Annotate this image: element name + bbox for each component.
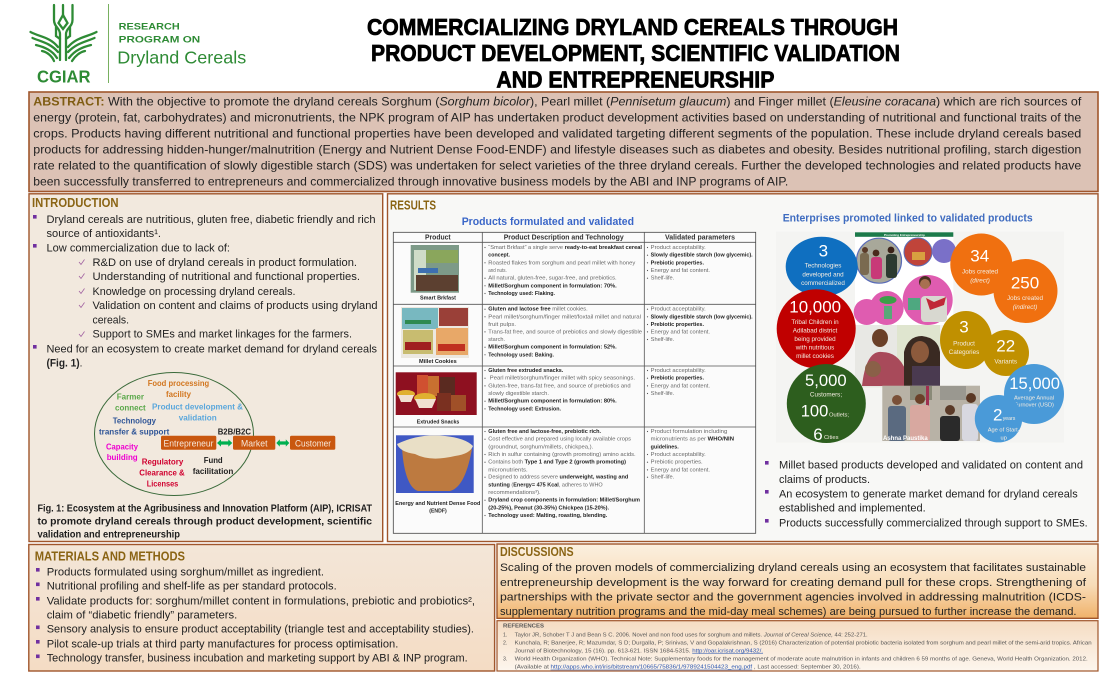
methods text: Sensory analysis to ensure product acceptability (triangle test and acceptability studies).	[47, 624, 474, 636]
reference list: Journal of Biotechnology, 15 (16). pp. 613-621. ISSN 1684-5315. http://oar.icrisat.org/9432/.	[515, 648, 763, 654]
discussions text: supplementary nutrition programs and the mid-day meal schemes) are being pursued to further increase the demand.	[500, 606, 1076, 618]
diagram: ecosystem ellipse: building	[107, 452, 138, 462]
methods text: claim of “diabetic friendly” parameters.	[47, 609, 237, 621]
intro text: Understanding of nutritional and functional properties.	[92, 271, 360, 283]
results summary bullets: claims of products.	[779, 474, 870, 486]
bubble: 34 direct jobs: (direct)	[970, 277, 990, 284]
bubble: 15,000 turnover: Average Annual	[1014, 395, 1054, 401]
logo: CGIAR Research Program on Dryland Cereals	[30, 4, 247, 87]
abstract text: rate related to the quantification of slowly digestible starch (SDS) was undertaken for select varieties of the three dryland cereals. Further the developed technologies and related products have	[33, 158, 1082, 172]
table description column	[484, 245, 643, 519]
reference list: 1.	[503, 633, 507, 639]
abstract text	[33, 94, 1082, 188]
bubble: 3 product categories: Categories	[949, 349, 979, 356]
intro text: cereals.	[92, 314, 129, 326]
intro text: Validation on content and claims of products using dryland	[92, 300, 378, 312]
table: products	[393, 232, 756, 533]
table description column: Contains both Type 1 and Type 2 (growth promoting)	[488, 460, 626, 466]
table description column: Roasted flakes from sorghum and pearl millet with honey	[488, 260, 636, 266]
table validated parameters column: Energy and fat content.	[651, 268, 710, 274]
panel: materials and methods	[29, 544, 495, 671]
icon: wheat emblem	[30, 5, 96, 61]
bubble: 3 technologies: 3	[819, 242, 828, 261]
table validated parameters column: Product formulation including	[651, 429, 727, 435]
intro bullets	[33, 215, 37, 349]
product: ENDF: (ENDF)	[429, 508, 447, 514]
title	[367, 14, 900, 92]
bubble: 10,000 tribal children: Adilabad district	[793, 328, 837, 335]
table validated parameters column: Energy and fat content.	[651, 383, 710, 389]
table description column: Pearl millet/sorghum/finger millet with spicy seasonings.	[490, 376, 635, 382]
product: smart brkfast: Smart Brkfast	[420, 296, 456, 302]
table header	[425, 233, 735, 242]
intro text: R&D on use of dryland cereals in product formulation.	[92, 257, 357, 269]
box: entrepreneur	[161, 436, 216, 450]
table validated parameters column: Shelf-life.	[651, 475, 674, 481]
intro text: source of antioxidants¹.	[46, 228, 161, 240]
title: COMMERCIALIZING DRYLAND CEREALS THROUGH	[367, 14, 898, 40]
bubble: 10,000 tribal children: 10,000	[789, 297, 841, 316]
table description column: Technology used: Extrusion.	[488, 406, 562, 412]
heading: discussions: DISCUSSIONS	[500, 545, 574, 559]
table description column: Technology used: Malting, roasting, blending.	[488, 513, 608, 519]
panel: results	[388, 194, 1098, 542]
results summary bullets: Products successfully commercialized through support to SMEs.	[779, 518, 1088, 530]
logo text: program on: PROGRAM ON	[119, 34, 200, 45]
bubble: 22 variants	[983, 330, 1029, 376]
table validated parameters column: Shelf-life.	[651, 276, 674, 282]
bubble: customers, outlets, cities: Customers;	[810, 392, 842, 399]
abstract text: crops. Products having different nutritional and functional properties have been developed and validated targeting different segments of the population. These include dryland cereals based	[33, 126, 1081, 140]
bubble: 34 direct jobs: 34	[970, 247, 989, 266]
table description column: micronutrients.	[488, 467, 528, 473]
abstract text: energy (protein, fat, carbohydrates) and micronutrients, the NPK program of AIP has undertaken product development activities based on understanding of nutritional and functional traits of the	[33, 110, 1082, 124]
diagram: ecosystem ellipse: Licenses	[147, 479, 178, 489]
discussions text	[500, 562, 1087, 618]
title: PRODUCT DEVELOPMENT, SCIENTIFIC VALIDATION	[371, 40, 900, 66]
table validated parameters column: Prebiotic properties.	[651, 376, 705, 382]
heading: enterprises promoted: Enterprises promoted linked to validated products	[783, 213, 1033, 225]
table validated parameters column: Product acceptability.	[651, 307, 706, 313]
box: market: Market	[241, 438, 268, 448]
table validated parameters column: micronutrients as per WHO/NIN	[651, 437, 734, 443]
results summary bullets	[765, 459, 1088, 530]
discussions text: partnerships with the private sector and the government agencies involved in addressing malnutrition (ICDS-	[500, 592, 1086, 604]
logo wordmark: CGIAR: CGIAR	[37, 67, 91, 87]
reference list: (Available at http://apps.who.int/iris/bitstream/10665/75836/1/9789241504423_eng.pdf , Last accessed: September 30, 2016).	[515, 665, 861, 671]
methods text: Products formulated using sorghum/millet as ingredient.	[47, 566, 324, 578]
bubble: 10,000 tribal children: millet cookies	[796, 353, 834, 360]
reference list: 2.	[503, 641, 507, 647]
reference list	[503, 633, 1092, 671]
diagram: ecosystem ellipse: Technology	[113, 416, 156, 426]
table validated parameters column: Prebiotic properties.	[651, 322, 705, 328]
discussions text: Scaling of the proven models of commercializing dryland cereals using an ecosystem that facilitates sustainable	[500, 562, 1086, 574]
photo: promoting entrepreneurship collage	[854, 232, 956, 325]
table description column: Gluten free extruded snacks.	[488, 368, 564, 374]
table description column: (20-25%), Peanut (30-35%) Chickpea (15-20%).	[488, 505, 610, 511]
diagram: ecosystem ellipse: Product development &	[152, 402, 243, 412]
table validated parameters column: Energy and fat content.	[651, 467, 710, 473]
bubble: 3 technologies: commercialized	[801, 280, 845, 287]
table description column: Gluten and lactose free millet cookies.	[488, 307, 588, 313]
box: customer	[290, 436, 335, 450]
table validated parameters column: Product acceptability.	[651, 452, 706, 458]
diagram: ecosystem ellipse: validation	[179, 413, 217, 423]
bubble: 3 product categories: Product	[953, 341, 975, 348]
table validated parameters column: Prebiotic properties.	[651, 260, 705, 266]
methods text: Nutritional profiling and shelf-life as per standard protocols.	[47, 581, 337, 593]
bubble: 2 years age of start-up: up	[1001, 435, 1007, 441]
heading: products formulated: Products formulated and validated	[462, 216, 634, 228]
table validated parameters column: Slowly digestible starch (low glycemic).	[651, 314, 753, 320]
product: millet cookies: Millet Cookies	[419, 359, 457, 365]
intro text	[46, 214, 378, 370]
bubble: 15,000 turnover: Turnover (USD)	[1014, 403, 1054, 409]
intro text: Support to SMEs and market linkages for the farmers.	[92, 329, 352, 341]
table description column: Technology used: Baking.	[488, 352, 555, 358]
diagram: ecosystem ellipse: Capacity	[106, 441, 138, 451]
product: ENDF	[395, 435, 480, 514]
intro text: Dryland cereals are nutritious, gluten free, diabetic friendly and rich	[46, 214, 376, 226]
bubble: 250 indirect jobs: (indirect)	[1013, 304, 1037, 311]
table validated parameters column: Energy and fat content.	[651, 329, 710, 335]
panel: abstract	[29, 92, 1098, 192]
diagram: ecosystem ellipse: Farmer	[117, 392, 145, 402]
abstract text: products for addressing hidden-hunger/malnutrition (Energy and Nutrient Dense Food-ENDF) and lifestyle diseases such as diabetes and obesity. Besides nutritional profiling, starch digestion	[33, 142, 1081, 156]
table description column: fruit pulps.	[488, 322, 516, 328]
bubble: 34 direct jobs: Jobs created	[962, 268, 999, 275]
results summary bullets: Millet based products developed and validated on content and	[779, 459, 1083, 471]
panel: references	[497, 621, 1098, 671]
table validated parameters column: Product acceptability.	[651, 245, 706, 251]
bubble: 3 product categories: 3	[959, 318, 969, 337]
diagram: ecosystem ellipse: B2B/B2C	[218, 427, 251, 437]
abstract text: been successfully transferred to entrepreneurs and commercialized through innovative business models by the ABI and INP programs of AIP.	[33, 174, 788, 188]
bubble: 2 years age of start-up: Age of Start-	[988, 428, 1020, 434]
bubble: 3 product categories	[940, 311, 992, 369]
bubble: 3 technologies: Technologies	[805, 263, 841, 270]
diagram: ecosystem ellipse: facility	[166, 389, 191, 399]
bubble: 10,000 tribal children: Tribal Children in	[791, 319, 839, 326]
table description column: starch.	[488, 337, 505, 343]
intro text: Low commercialization due to lack of:	[46, 243, 230, 255]
methods text: Technology transfer, business incubation and marketing support by ABI & INP program.	[47, 653, 468, 665]
intro text: (Fig. 1).	[46, 358, 82, 370]
table validated parameters column: guidelines.	[651, 444, 679, 450]
table validated parameters column: Shelf-life.	[651, 337, 674, 343]
bubble: 22 variants: Variants	[994, 358, 1017, 365]
table header: Validated parameters	[665, 233, 735, 242]
product: extruded snacks: Extruded Snacks	[417, 420, 459, 426]
figure caption: to promote dryland cereals through product development, scientific	[38, 517, 372, 528]
table header: Product Description and Technology	[504, 233, 625, 242]
arrow: entrepreneur to market	[217, 439, 232, 447]
product: extruded snacks	[396, 372, 477, 426]
heading: introduction: INTRODUCTION	[32, 196, 118, 210]
photo: promoting entrepreneurship collage: Promoting Entrepreneurship	[884, 233, 925, 237]
panel: discussions	[497, 544, 1098, 618]
figure caption: Fig. 1: Ecosystem at the Agribusiness and Innovation Platform (AIP), ICRISAT	[38, 504, 373, 515]
table validated parameters column: Shelf-life.	[651, 391, 674, 397]
methods text: Pilot scale-up trials at third party manufactures for process optimisation.	[47, 639, 398, 651]
diagram: ecosystem ellipse: facilitation	[193, 466, 233, 476]
table description column: All natural, gluten-free, sugar-free, and prebiotics.	[488, 276, 617, 282]
heading: results: RESULTS	[390, 198, 436, 212]
table description column: Cost effective and prepared using locally available crops	[488, 437, 631, 443]
bubble: customers, outlets, cities: 100	[801, 402, 828, 421]
photo: mother and child	[855, 325, 940, 387]
bubble: 3 technologies: developed and	[802, 271, 844, 278]
bubble: 250 indirect jobs	[994, 259, 1058, 323]
intro checkmarks	[79, 260, 84, 336]
reference list: Taylor JR, Schober T J and Bean S C. 2006. Novel and non food uses for sorghum and millets. Journal of Cereal Science, 44: 252-271.	[515, 633, 868, 639]
bubble: 34 direct jobs	[950, 234, 1012, 296]
diagram: ecosystem ellipse: Regulatory	[142, 456, 184, 466]
figure caption: validation and entrepreneurship	[38, 530, 180, 541]
table header: Product	[425, 233, 451, 242]
bubble: customers, outlets, cities: 6	[813, 425, 823, 444]
bubble: 250 indirect jobs: 250	[1011, 273, 1039, 292]
table description column: “Smart Brkfast” a single serve ready-to-eat breakfast cereal	[488, 245, 643, 251]
table description column: slowly digestible starch.	[488, 391, 549, 397]
title: AND ENTREPRENEURSHIP	[496, 66, 774, 92]
bubble: 3 technologies	[786, 237, 858, 297]
table description column: Gluten-free, trans-fat free, and source of prebiotics and	[488, 383, 631, 389]
table validated parameters column: Prebiotic properties.	[651, 460, 703, 466]
bubble: 10,000 tribal children: with nutritious	[795, 345, 834, 352]
reference list: Kunchala, R; Banerjee, R; Mazumdar, S D; Durgalla, P; Srinivas, V and Gopalakrishnan, S (2016) Characterization of potential probiotic bacteria isolated from sorghum and pearl millet of the semi-arid tropics. African	[515, 641, 1092, 647]
table description column: Millet/Sorghum component in formulation: 80%.	[488, 399, 617, 405]
bubble: 10,000 tribal children	[777, 289, 856, 368]
box: market	[233, 436, 275, 450]
bubble: 250 indirect jobs: Jobs created	[1007, 295, 1044, 302]
photo caption: Ashna Paustika	[883, 436, 928, 442]
table description column: Millet/Sorghum component in formulation: 52%.	[488, 345, 617, 351]
diagram: ecosystem ellipse: connect	[115, 403, 146, 413]
table description column: Dryland crop components in formulation: Millet/Sorghum	[488, 498, 640, 504]
table description column: Trans-fat free, and source of prebiotics and slowly digestible	[488, 329, 642, 335]
bubble: 10,000 tribal children: being provided	[794, 336, 836, 343]
table validated parameters column	[647, 245, 753, 481]
bubble: 22 variants: 22	[996, 337, 1015, 356]
diagram: ecosystem ellipse: Fund	[204, 455, 223, 465]
discussions text: entrepreneurship development is the way forward for creating demand pull for these crops. Strengthening of	[500, 577, 1087, 589]
product: millet cookies	[401, 307, 469, 365]
table description column: and nuts.	[488, 268, 507, 274]
bubble: 15,000 turnover	[1004, 364, 1064, 424]
intro text: Knowledge on processing dryland cereals.	[92, 286, 296, 298]
table description column: stunting (Energy= 475 Kcal , adheres to WHO	[488, 482, 603, 488]
product: ENDF: Energy and Nutrient Dense Food	[395, 501, 480, 507]
photo: enterprise handover group	[882, 386, 980, 442]
table description column: Rich in sulfur containing (growth promoting) amino acids.	[488, 452, 636, 458]
diagram: ecosystem ellipse	[94, 372, 254, 496]
heading: materials and methods: MATERIALS AND METHODS	[35, 550, 185, 564]
reference list: 3.	[503, 656, 507, 662]
bubble: customers, outlets, cities: Cities	[824, 435, 839, 441]
figure caption	[38, 504, 373, 541]
bubble: customers, outlets, cities: 5,000	[805, 371, 847, 390]
results summary bullets: established and implemented.	[779, 503, 926, 515]
diagram: ecosystem ellipse: Clearance &	[139, 467, 185, 477]
intro text: Need for an ecosystem to create market demand for dryland cereals	[46, 344, 377, 356]
table description column: recommendations³).	[488, 490, 541, 496]
reference list: World Health Organization (WHO). Technical Note: Supplementary foods for the management of moderate acute malnutrition in infants and children 6 59 months of age. Geneva, World Health Organization. 2012.	[515, 656, 1088, 662]
results summary bullets: An ecosystem to generate market demand for dryland cereals	[779, 489, 1078, 501]
logo divider	[107, 4, 110, 83]
bubble: 2 years age of start-up: 2	[993, 406, 1002, 425]
bubble: customers, outlets, cities	[787, 364, 866, 444]
table description column: (groundnut, sorghum/millets, chickpea,).	[488, 444, 593, 450]
product: smart brkfast	[411, 245, 459, 302]
bubble: 2 years age of start-up	[975, 395, 1022, 442]
logo text: Dryland Cereals: Dryland Cereals	[117, 47, 247, 67]
table description column: concept.	[488, 253, 511, 259]
box: customer: Customer	[295, 438, 331, 448]
table description column: Technology used: Flaking.	[488, 291, 556, 297]
bubble: 15,000 turnover: 15,000	[1009, 374, 1060, 393]
panel: introduction	[29, 194, 383, 542]
enterprises infographic background	[776, 232, 1064, 443]
heading: references: REFERENCES	[503, 624, 544, 630]
table description column: Gluten free and lactose-free, prebiotic rich.	[488, 429, 602, 435]
table description column: Millet/Sorghum component in formulation: 70%.	[488, 283, 617, 289]
abstract text: ABSTRACT: With the objective to promote the dryland cereals Sorghum ( Sorghum bicolor ), Pearl millet (Pennisetum glaucum ) and Finger millet ( Eleusine coracana ) which are rich sources of	[33, 94, 1082, 108]
methods text	[47, 566, 475, 665]
diagram: ecosystem ellipse: Food processing	[148, 378, 209, 388]
methods bullets	[36, 568, 40, 658]
arrow: market to customer	[276, 439, 289, 447]
logo text: research program on: RESEARCH	[119, 21, 180, 32]
methods text: Validate products for: sorghum/millet content in formulations, prebiotic and probiotics²,	[47, 595, 475, 607]
bubble: customers, outlets, cities: Outlets;	[829, 413, 849, 419]
table description column: Designed to address severe underweight, wasting and	[488, 475, 628, 481]
table validated parameters column: Product acceptability.	[651, 368, 706, 374]
bubble: 2 years age of start-up: years	[1003, 416, 1016, 422]
table validated parameters column: Slowly digestible starch (low glycemic).	[651, 253, 753, 259]
table description column: Pearl millet/sorghum/finger millet/foxtail millet and natural	[488, 314, 641, 320]
diagram: ecosystem ellipse: transfer & support	[99, 427, 169, 437]
box: entrepreneur: Entrepreneur	[164, 438, 214, 448]
